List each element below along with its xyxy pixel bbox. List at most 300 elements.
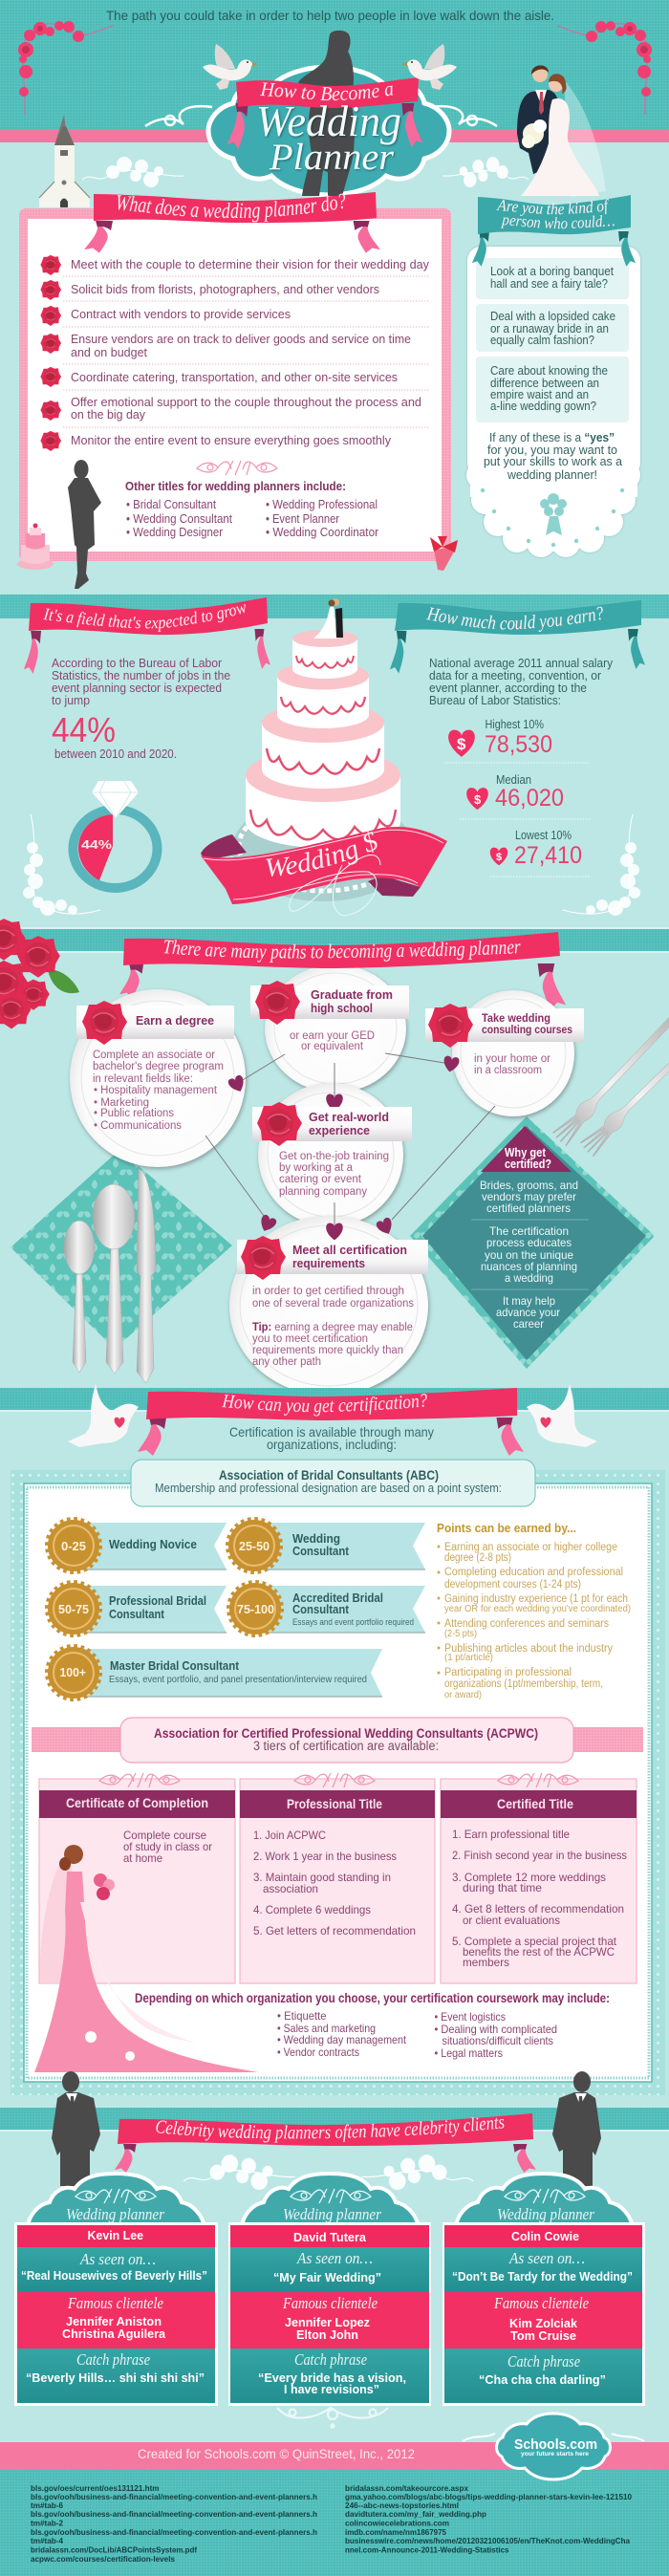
tier: professional bridal consultant: 50-75: [58, 1603, 89, 1616]
sources right: bridalassn.com/takeourcore.aspx: [345, 2483, 468, 2493]
wedding cake: [232, 598, 414, 901]
tier: wedding consultant: [227, 1520, 425, 1571]
planner card 3: [442, 2174, 645, 2406]
time span: between 2010 and 2020.: [54, 747, 177, 761]
logo badge: [496, 2414, 611, 2479]
coursework list: • Etiquette: [277, 2009, 327, 2023]
plate text: experience: planning company: [279, 1186, 367, 1198]
title line 2: Wedding: [256, 97, 401, 145]
sources left: bridalassn.com/DocLib/ABCPointsSystem.pdf: [31, 2544, 197, 2554]
sources left: tm#tab-6: [31, 2500, 63, 2510]
sources left: bls.gov/ooh/business-and-financial/meeting-convention-and-event-planners.h: [31, 2509, 317, 2519]
column header: [39, 1790, 235, 1818]
planner card 3: “Cha cha cha darling”: [479, 2373, 606, 2387]
ribbon body: [201, 827, 447, 904]
napkin: [11, 1150, 232, 1349]
sources left: bls.gov/ooh/business-and-financial/meeting-convention-and-event-planners.h: [31, 2527, 317, 2537]
planner card 2: [228, 2174, 431, 2406]
tier: wedding consultant: Consultant: [292, 1545, 350, 1558]
other titles list: • Wedding Coordinator: [266, 525, 379, 539]
schools.com logo: [463, 2414, 644, 2479]
duties list: Meet with the couple to determine their vision for their wedding day: [71, 257, 429, 271]
salary lowest: [490, 828, 582, 869]
tier: master bridal consultant: [48, 1646, 382, 1699]
dove right: [527, 1384, 597, 1447]
plate text: certification: requirements more quickly than: [252, 1345, 403, 1356]
column text: during that time: [463, 1881, 542, 1894]
planner card 1: “Beverly Hills… shi shi shi shi”: [26, 2371, 205, 2385]
plate text: degree: Complete an associate or: [93, 1050, 215, 1061]
plate text: certification: any other path: [252, 1356, 321, 1368]
planner card 2: As seen on…: [296, 2249, 373, 2267]
column text: 2. Work 1 year in the business: [253, 1850, 397, 1863]
points list: Attending conferences and seminars: [444, 1618, 609, 1630]
dome: [242, 2174, 419, 2227]
duties list: Offer emotional support to the couple throughout the process and: [71, 395, 421, 409]
section band 4: [0, 1388, 669, 1411]
pie slice: [78, 814, 113, 880]
salary lowest: Lowest 10%: [515, 828, 572, 842]
groom silhouette left: [52, 2071, 100, 2186]
planner card 2: Jennifer Lopez: [285, 2316, 370, 2329]
points list: development courses (1-24 pts): [444, 1579, 581, 1591]
points list: (1 pt/article): [444, 1653, 493, 1663]
certification ribbon: [138, 1388, 524, 1456]
flourish: [505, 2189, 585, 2203]
header triangle: [481, 1126, 572, 1172]
points list: Completing education and professional: [444, 1567, 623, 1578]
tier: professional bridal consultant: [48, 1583, 227, 1634]
panel: what does a wedding planner do: [19, 192, 451, 561]
knife: [137, 1169, 156, 1383]
teal ribbon: [478, 195, 631, 234]
flourish: [76, 2189, 156, 2203]
salary highest: $: [457, 735, 466, 753]
question text: put your skills to work as a: [484, 454, 623, 468]
sources right: gma.yahoo.com/blogs/abc-blogs/tips-wedding-planner-stars-kevin-lee-121510: [345, 2492, 632, 2501]
column text: [123, 1829, 212, 1865]
sources right: [345, 2483, 632, 2554]
panel: are you the kind of person: [465, 195, 641, 558]
tail right: [513, 2144, 536, 2173]
question text: a-line wedding gown?: [490, 399, 596, 413]
points list: Gaining industry experience (1 pt for each: [444, 1593, 628, 1605]
coursework list: • Dealing with complicated: [434, 2023, 557, 2036]
sources left: bls.gov/ooh/business-and-financial/meeting-convention-and-event-planners.h: [31, 2492, 317, 2501]
points list: Participating in professional: [444, 1667, 572, 1678]
duties list: Solicit bids from florists, photographers, and other vendors: [71, 282, 379, 296]
plate text: certification: one of several trade organizations: [252, 1298, 414, 1310]
column header: [240, 1790, 435, 1818]
flourish: [498, 1773, 578, 1787]
name strip: [17, 2225, 215, 2247]
reasons: process educates: [486, 1236, 572, 1249]
salary median: Median: [496, 772, 531, 787]
doily card: [466, 247, 640, 557]
duties list: Contract with vendors to provide services: [71, 307, 291, 321]
catch phrase block: [230, 2349, 429, 2403]
coursework list: • Wedding day management: [277, 2033, 407, 2046]
certification intro: organizations, including:: [267, 1437, 397, 1452]
question text: Deal with a lopsided cake: [490, 309, 615, 323]
dove left: [68, 1384, 139, 1447]
column: professional title: Professional Title: [287, 1796, 382, 1811]
ribbon left tail: [84, 221, 113, 253]
salary highest: Highest 10%: [486, 717, 544, 731]
large spoon: [93, 1184, 135, 1374]
tail right: [497, 1418, 524, 1456]
church: [39, 115, 90, 207]
left tail: [119, 963, 143, 998]
planner card 3: As seen on…: [508, 2249, 585, 2267]
as seen on block: [17, 2247, 215, 2292]
reasons: [480, 1179, 578, 1331]
tail left: [138, 1418, 166, 1456]
duties list: Coordinate catering, transportation, and other on-site services: [71, 370, 398, 384]
planner card 1: [14, 2174, 218, 2406]
ribbon right tail: [618, 231, 636, 267]
sources right: colincowiecelebrations.com: [345, 2519, 449, 2528]
column text: 5. Complete a special project that: [452, 1935, 617, 1948]
plate: [232, 796, 414, 901]
salary text: event planner, according to the: [429, 681, 587, 695]
cutlery: [64, 1169, 156, 1383]
ribbon swirl: [290, 855, 380, 916]
tier 1: [292, 639, 357, 679]
coursework list: [277, 2009, 557, 2060]
strip: experience: experience: [309, 1124, 370, 1137]
reasons: you on the unique: [485, 1248, 573, 1262]
points list: organizations (1pt/membership, term,: [444, 1678, 603, 1690]
sources left: bls.gov/oes/current/oes131121.htm: [31, 2483, 160, 2493]
growth text: Statistics, the number of jobs in the: [52, 668, 230, 682]
footer teal area: [0, 2469, 669, 2576]
question text: hall and see a fairy tale?: [490, 276, 608, 291]
logo name: Schools.com: [514, 2436, 597, 2453]
salary lowest: $: [496, 852, 502, 863]
coursework list: • Sales and marketing: [277, 2022, 376, 2035]
coursework list: • Vendor contracts: [277, 2046, 359, 2059]
strip: certification: Meet all certification: [292, 1244, 407, 1257]
plate text: degree: in relevant fields like:: [93, 1073, 193, 1085]
other titles heading: Other titles for wedding planners include:: [125, 479, 346, 493]
plate text: courses: in a classroom: [474, 1065, 542, 1076]
heading: There are many paths to becoming a wedding planner: [164, 940, 520, 963]
section band 5: [0, 2108, 669, 2131]
dove left: [203, 44, 258, 90]
ACPWC band: [32, 1727, 643, 1752]
section band 2: [0, 595, 669, 618]
header pink band: [0, 129, 669, 142]
ring: [73, 810, 157, 888]
salary highest: 78,530: [485, 731, 552, 758]
column text: 3. Maintain good standing in: [253, 1871, 391, 1884]
salary text: National average 2011 annual salary: [429, 656, 613, 670]
floral under header left: [82, 157, 183, 187]
other titles list: • Event Planner: [266, 511, 340, 526]
planner card 2: Wedding planner: [283, 2205, 381, 2223]
points list: Publishing articles about the industry: [444, 1643, 613, 1655]
strip: certification: [237, 1236, 428, 1280]
salary highest: [448, 717, 552, 758]
column text: 4. Get 8 letters of recommendation: [452, 1902, 624, 1916]
doily dots: [481, 488, 624, 547]
inner diamond: [422, 1126, 646, 1360]
header teal patterned band: [0, 0, 669, 129]
pie label: 44%: [81, 837, 113, 852]
plate text: graduate: [290, 1030, 375, 1052]
growth text: According to the Bureau of Labor: [52, 656, 223, 670]
floral left: [23, 814, 100, 916]
planner card 1: Jennifer Aniston: [66, 2315, 162, 2328]
diamond why get certified: [410, 1116, 655, 1369]
column text: [452, 1828, 627, 1969]
ribbon fold right: [368, 876, 421, 897]
plate: earn a degree: [70, 989, 246, 1167]
logo swirls: [463, 2434, 644, 2441]
tier: accredited bridal consultant: Essays and event portfolio required: [292, 1617, 414, 1628]
title line 3: Planner: [269, 137, 395, 178]
sources right: imdb.com/name/nm1867975: [345, 2527, 446, 2537]
ribbon: [395, 600, 641, 635]
sources right: businesswire.com/news/home/20120321006105/en/TheKnot.com-WeddingCha: [345, 2536, 630, 2545]
duties list: Monitor the entire event to ensure everything goes smoothly: [71, 433, 391, 447]
bouquet icon: [540, 493, 567, 535]
planner card 2: Famous clientele: [282, 2294, 378, 2312]
flourish: [197, 461, 277, 475]
certification intro: Certification is available through many: [229, 1424, 434, 1440]
salary median: 46,020: [495, 785, 564, 812]
planner card 1: Christina Aguilera: [62, 2327, 166, 2341]
plate text: graduate: or equivalent: [301, 1041, 364, 1052]
planner card 2: Elton John: [296, 2328, 358, 2342]
44 percent figure: 44%: [52, 710, 116, 749]
tail right: [628, 629, 645, 669]
planner card 3: “Don’t Be Tardy for the Wedding”: [452, 2270, 633, 2284]
duties list: Ensure vendors are on track to deliver goods and service on time: [71, 332, 411, 346]
plate text: degree: • Hospitality management: [94, 1085, 218, 1096]
flourish: [99, 1773, 180, 1787]
points list: degree (2-8 pts): [444, 1552, 511, 1564]
sources right: 246--abc-news-topstories.html: [345, 2500, 459, 2510]
other titles list: • Wedding Professional: [266, 497, 378, 511]
salary text: data for a meeting, convention, or: [429, 668, 602, 682]
coursework list: • Event logistics: [434, 2010, 506, 2024]
plate text: certification: you to meet certification: [252, 1333, 368, 1345]
ACPWC subtitle: 3 tiers of certification are available:: [253, 1739, 439, 1753]
sources left: acpwc.com/courses/certification-levels: [31, 2554, 175, 2564]
diamond: [92, 781, 139, 818]
gift: [430, 536, 458, 571]
section band 3: [0, 928, 669, 952]
reasons: vendors may prefer: [482, 1190, 576, 1203]
column text: benefits the rest of the ACPWC: [463, 1945, 615, 1959]
rose bullets: [40, 255, 61, 451]
as seen on block: [230, 2247, 429, 2292]
tier: accredited bridal consultant: Accredited Bridal: [292, 1591, 383, 1605]
ribbon left tail: [472, 231, 489, 267]
name strip: [230, 2225, 429, 2247]
column text: 5. Get letters of recommendation: [253, 1924, 416, 1937]
plate: consulting courses: [452, 990, 574, 1116]
reasons: nuances of planning: [481, 1260, 577, 1273]
column text: 4. Complete 6 weddings: [253, 1903, 371, 1916]
floral vine left: [18, 21, 113, 115]
column text: association: [263, 1882, 318, 1895]
column: certificate of completion: Certificate of Completion: [66, 1795, 208, 1810]
heading: How can you get certification?: [222, 1394, 427, 1417]
planner card 1: Catch phrase: [76, 2350, 150, 2369]
column header: [441, 1790, 637, 1818]
strip: earn a degree: Earn a degree: [136, 1014, 214, 1028]
forks: [551, 1016, 669, 1158]
plate text: experience: by working at a: [279, 1162, 354, 1174]
ribbon tails: [227, 103, 248, 149]
title ribbon: [236, 77, 419, 108]
flourish: [291, 2189, 371, 2203]
duties list: and on budget: [71, 345, 147, 359]
strip: earn a degree: [76, 1001, 234, 1045]
planner card 3: Catch phrase: [507, 2352, 580, 2370]
plate text: experience: catering or event: [279, 1174, 362, 1185]
strip: courses: Take wedding: [482, 1013, 550, 1025]
tier: wedding consultant: 25-50: [239, 1540, 270, 1553]
reasons: It may help: [503, 1294, 555, 1308]
other titles list: • Wedding Designer: [126, 525, 224, 539]
floral vine right: [557, 21, 652, 115]
ribbon right tail: [354, 221, 380, 253]
plate: graduate: [265, 964, 406, 1093]
bottom ornament: [277, 2408, 388, 2428]
tier: accredited bridal consultant: [229, 1583, 425, 1634]
clientele block: [444, 2292, 642, 2349]
planner card 1: Famous clientele: [67, 2294, 163, 2312]
section heading: What does a wedding planner do?: [117, 193, 346, 222]
florals between cards: [183, 2154, 473, 2190]
catch phrase block: [17, 2349, 215, 2403]
column: certificate of completion: [39, 1773, 235, 1983]
tail left: [390, 631, 406, 674]
small spoon: [64, 1221, 95, 1373]
certification intro: [229, 1424, 434, 1452]
plate text: courses: [474, 1053, 550, 1076]
name strip: [444, 2225, 642, 2247]
paths ribbon: [123, 932, 560, 968]
planner card 1: As seen on…: [79, 2250, 156, 2268]
points list: [437, 1522, 631, 1700]
big roses: [0, 919, 79, 1028]
plate: certification requirements: [229, 1216, 428, 1396]
strip: graduate: Graduate from: [311, 988, 393, 1002]
fork 2: [579, 1030, 669, 1158]
question text: equally calm fashion?: [490, 333, 594, 347]
tier: wedding novice: Wedding Novice: [109, 1538, 197, 1551]
ring chart: [73, 781, 157, 888]
dove right: [401, 44, 457, 90]
businesswoman silhouette: [68, 460, 101, 589]
title line 1: How to Become a: [260, 82, 394, 101]
plate text: degree: bachelor's degree program: [93, 1061, 224, 1072]
sources left: tm#tab-4: [31, 2536, 63, 2545]
salary median: $: [474, 792, 482, 807]
heading: Why get: [505, 1146, 547, 1159]
strip: courses: [425, 1004, 584, 1048]
planner silhouette: [298, 31, 355, 196]
planner card 3: Colin Cowie: [511, 2230, 579, 2243]
tier: master bridal consultant: 100+: [59, 1666, 86, 1679]
planner card 1: Kevin Lee: [88, 2229, 143, 2242]
other titles list: • Wedding Consultant: [126, 511, 232, 526]
plate text: degree: • Communications: [94, 1120, 182, 1132]
outer diamond: [410, 1116, 655, 1369]
column text: 1. Earn professional title: [452, 1828, 570, 1841]
duties list: [71, 257, 429, 447]
growth text: event planning sector is expected: [52, 681, 222, 695]
question text: Care about knowing the: [490, 363, 608, 378]
tier 4: [246, 775, 400, 848]
white swirls beside title: [145, 106, 497, 126]
salary text: [429, 656, 613, 707]
heading: Celebrity wedding planners often have celebrity clients: [156, 2117, 505, 2143]
column text: members: [463, 1956, 509, 1969]
bride illustration: [34, 1845, 258, 2072]
question text: wedding planner!: [507, 467, 597, 482]
wedding dollar ribbon: [201, 827, 447, 916]
question text: Look at a boring banquet: [490, 264, 614, 278]
question text: [484, 264, 623, 482]
plate text: degree: • Marketing: [94, 1097, 149, 1109]
small cake: [17, 524, 54, 570]
ribbon: [118, 2113, 533, 2146]
planner card 3: Tom Cruise: [510, 2329, 576, 2343]
planner card 1: “Real Housewives of Beverly Hills”: [21, 2269, 207, 2283]
reasons: a wedding: [505, 1271, 553, 1285]
tier: professional bridal consultant: Consultant: [109, 1608, 165, 1621]
coursework list: • Legal matters: [434, 2046, 503, 2060]
tier 2: [277, 676, 369, 728]
column: professional title: [240, 1773, 435, 1983]
planner card 2: Catch phrase: [294, 2350, 367, 2369]
heading: It's a field that's expected to grow: [43, 604, 246, 633]
section ribbon: [94, 192, 377, 223]
plate text: certification: in order to get certified through: [252, 1286, 404, 1297]
reasons: advance your: [496, 1306, 560, 1319]
plate text: experience: Get on-the-job training: [279, 1151, 389, 1162]
heading: [505, 1146, 551, 1171]
fork 1: [551, 1016, 669, 1147]
other titles list: [126, 497, 379, 539]
ABC plaque: [131, 1460, 535, 1506]
column text: or client evaluations: [463, 1914, 560, 1927]
section 3 ribbon tails: [119, 963, 566, 1009]
other titles list: • Bridal Consultant: [126, 497, 216, 511]
salary text: Bureau of Labor Statistics:: [429, 693, 561, 707]
tail left: [24, 631, 41, 674]
points heading: Points can be earned by...: [437, 1522, 576, 1535]
ribbon: [146, 1388, 517, 1420]
strip: graduate: high school: [311, 1002, 373, 1015]
flourish: [294, 1773, 375, 1787]
reasons: certified planners: [486, 1201, 571, 1215]
question text: or a runaway bride in an: [490, 321, 609, 336]
bride and groom: [517, 65, 606, 197]
title badge: [208, 67, 449, 195]
reasons: career: [513, 1317, 544, 1331]
catch phrase block: [444, 2349, 642, 2403]
sources left: tm#tab-2: [31, 2519, 63, 2528]
points list: (2-5 pts): [444, 1629, 477, 1639]
ribbon heading: [496, 199, 615, 229]
